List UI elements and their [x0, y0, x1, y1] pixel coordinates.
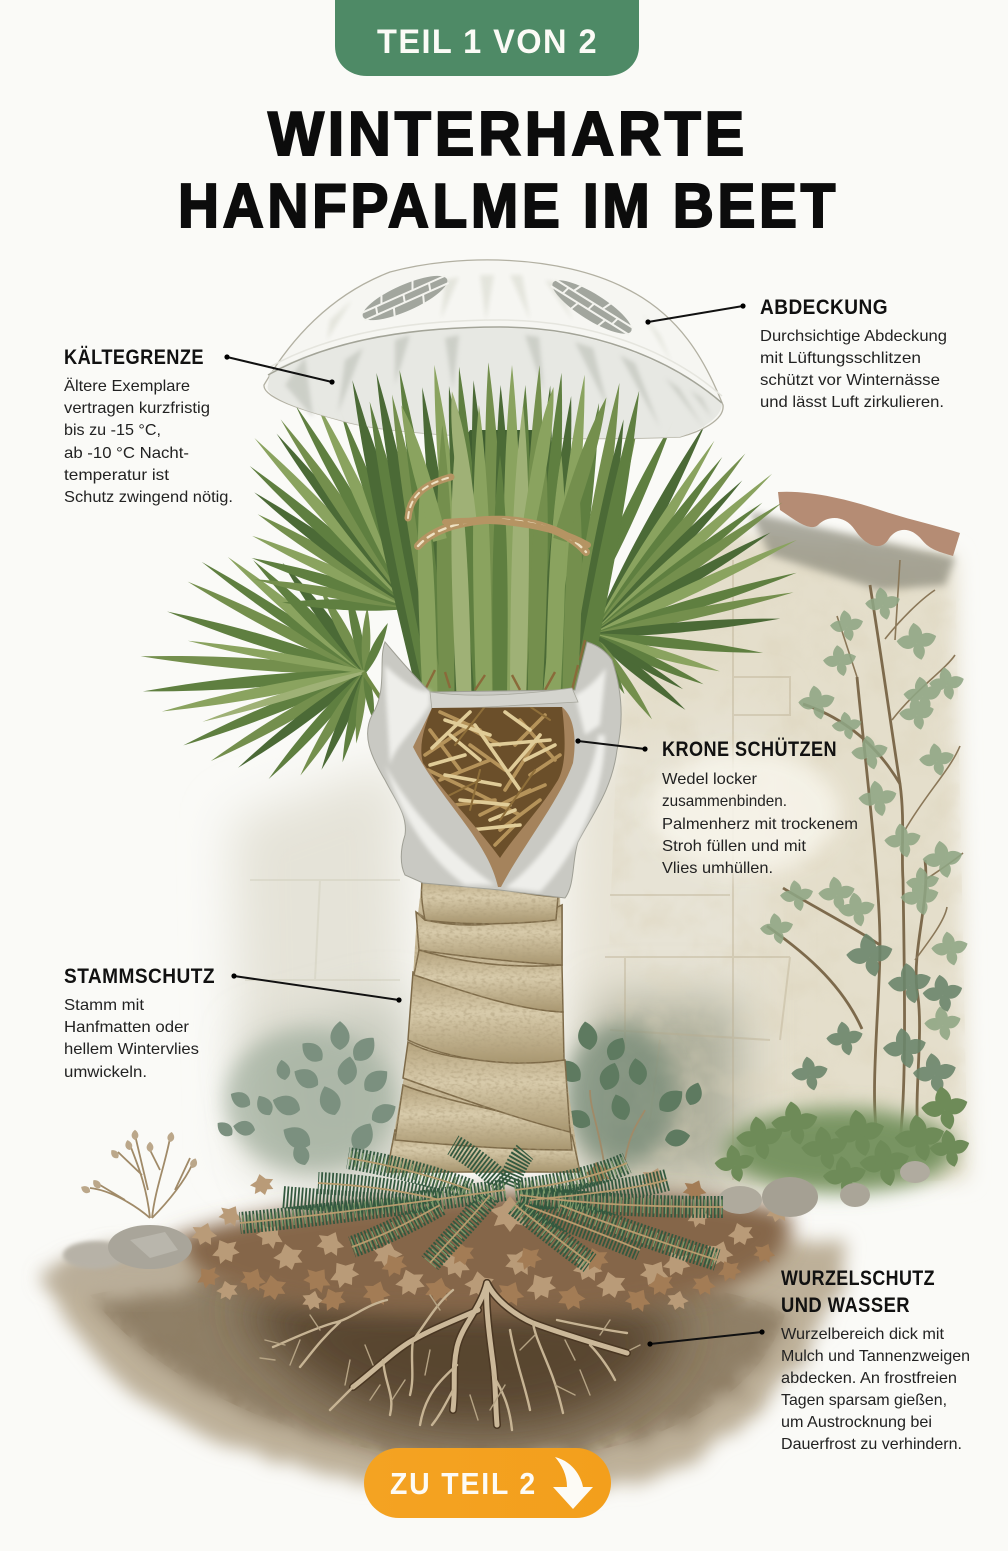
- tied central frond bundle: [344, 362, 647, 697]
- rope ties: [408, 477, 588, 552]
- callout: Abdeckung: [645, 296, 947, 411]
- garden wall: [232, 512, 968, 1190]
- mulch layer: [40, 1160, 930, 1316]
- far right ground plants: [714, 1085, 971, 1198]
- callout: Stammschutz: Stamm mit: [64, 997, 145, 1014]
- callout: Abdeckung: und lässt Luft zirkulieren.: [760, 394, 944, 411]
- callout: Krone schützen: zusammenbinden.: [662, 793, 787, 810]
- next-part button: ZU TEIL 2: [390, 1466, 537, 1501]
- callout: Krone schützen: Vlies umhüllen.: [662, 860, 773, 877]
- shrubs beside the wall: [79, 1020, 971, 1218]
- soft light behind Krone label: [650, 750, 840, 874]
- stones: [63, 1161, 930, 1269]
- callout: Krone schützen: Stroh füllen und mit: [662, 838, 807, 855]
- top tab: [335, 0, 639, 76]
- callout: Stammschutz: [64, 965, 402, 1081]
- callout: Krone schützen: [575, 738, 858, 877]
- callout: Wurzelschutz und Wasser: [647, 1267, 970, 1453]
- front blades: [394, 386, 614, 695]
- twiggy plant: [90, 1090, 645, 1218]
- wall roof tiles: [778, 492, 960, 556]
- icon: curved down arrow: [553, 1457, 593, 1509]
- callout: Abdeckung: Durchsichtige Abdeckung: [760, 328, 947, 345]
- callout: Kältegrenze: temperatur ist: [64, 467, 170, 484]
- callout: Kältegrenze: ab -10 °C Nacht-: [64, 445, 189, 462]
- right bush leaves: [552, 1020, 706, 1148]
- title: [178, 100, 839, 241]
- callout: Krone schützen: Wedel locker: [662, 771, 758, 788]
- callout: Kältegrenze: vertragen kurzfristig: [64, 400, 210, 417]
- callout: Stammschutz: hellem Wintervlies: [64, 1041, 199, 1058]
- right fan: [579, 417, 799, 722]
- title: HANFPALME IM BEET: [178, 172, 839, 241]
- callout: Kältegrenze: bis zu -15 °C,: [64, 422, 161, 439]
- vent left: [358, 267, 452, 329]
- title: WINTERHARTE: [268, 100, 748, 169]
- palm fronds, side fans: [140, 397, 799, 782]
- fir branches: [240, 1145, 723, 1263]
- callout: Wurzelschutz und Wasser: abdecken. An frostfreien: [781, 1370, 957, 1387]
- callout: Krone schützen: KRONE SCHÜTZEN: [662, 738, 837, 761]
- callout: Wurzelschutz und Wasser: Mulch und Tannenzweigen: [781, 1348, 970, 1365]
- top tab: TEIL 1 VON 2: [377, 23, 598, 61]
- burlap bands: [387, 875, 580, 1172]
- soil mound: [40, 1228, 850, 1490]
- callout: Abdeckung: schützt vor Winternässe: [760, 372, 940, 389]
- roots: [260, 1283, 640, 1430]
- straw at frond base: [425, 640, 585, 690]
- callout: Abdeckung: mit Lüftungsschlitzen: [760, 350, 921, 367]
- callout: Wurzelschutz und Wasser: um Austrocknung bei: [781, 1414, 932, 1431]
- callout: Wurzelschutz und Wasser: WURZELSCHUTZ: [781, 1267, 935, 1290]
- callout: Kältegrenze: [64, 346, 335, 506]
- dome cover: [264, 260, 723, 439]
- lower left fan: [140, 553, 392, 782]
- callout: Wurzelschutz und Wasser: Tagen sparsam gießen,: [781, 1392, 947, 1409]
- callout: Krone schützen: Palmenherz mit trockenem: [662, 816, 858, 833]
- callout: Stammschutz: STAMMSCHUTZ: [64, 965, 215, 988]
- vent right: [546, 272, 638, 342]
- callout: Stammschutz: umwickeln.: [64, 1064, 147, 1081]
- straw: [421, 707, 565, 858]
- fleece wrap with straw filling: [368, 642, 621, 898]
- inner liner: [413, 707, 575, 887]
- callout: Wurzelschutz und Wasser: Dauerfrost zu verhindern.: [781, 1436, 962, 1453]
- callout: Kältegrenze: Ältere Exemplare: [64, 377, 190, 395]
- callout: Stammschutz: Hanfmatten oder: [64, 1019, 190, 1036]
- left bush leaves: [214, 1021, 400, 1168]
- climbing shrub: [760, 560, 970, 1140]
- callout: Kältegrenze: Schutz zwingend nötig.: [64, 489, 233, 506]
- next-part button: [364, 1448, 611, 1518]
- callout: Kältegrenze: KÄLTEGRENZE: [64, 346, 204, 369]
- callout: Abdeckung: ABDECKUNG: [760, 296, 888, 319]
- upper left fan: [246, 397, 418, 613]
- callout: Wurzelschutz und Wasser: Wurzelbereich dick mit: [781, 1326, 945, 1343]
- burlap trunk wrap: [387, 873, 580, 1172]
- callout: Wurzelschutz und Wasser: UND WASSER: [781, 1294, 910, 1317]
